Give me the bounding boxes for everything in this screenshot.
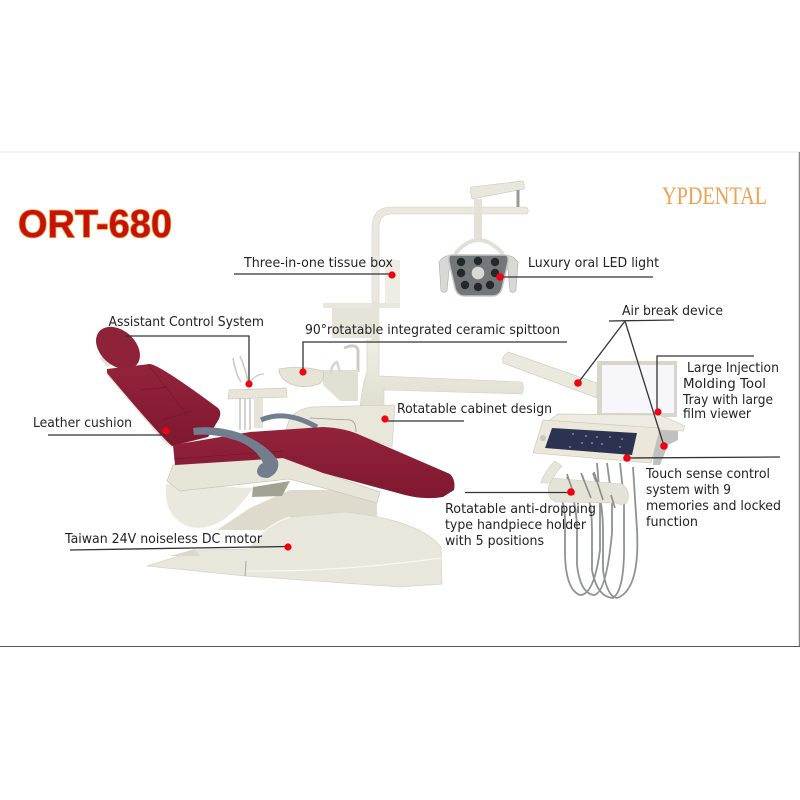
chair pivot disc — [166, 484, 253, 528]
chair base — [147, 490, 442, 587]
handpiece hoses — [555, 463, 637, 598]
light yoke — [455, 240, 503, 254]
light stem — [474, 199, 482, 239]
label: rotatable cabinet design: Rotatable cabinet design — [397, 401, 552, 417]
label: large injection molding tool tray: Molding Tool — [683, 376, 766, 392]
chair back — [106, 364, 220, 447]
label: luxury oral LED light — [496, 255, 659, 281]
label: DC motor: Taiwan 24V noiseless DC motor — [64, 531, 262, 547]
film viewer — [597, 361, 677, 417]
tray side bracket — [653, 428, 678, 465]
upper light arm — [471, 181, 524, 199]
label: large injection molding tool tray: film viewer — [683, 406, 751, 422]
far armrest — [261, 416, 317, 427]
title: ORT-680 — [18, 203, 172, 246]
label: handpiece holder: type handpiece holder — [445, 517, 586, 533]
instrument tray — [543, 414, 685, 431]
label: rotatable ceramic spittoon — [299, 322, 567, 376]
label: touch sense control: memories and locked — [646, 498, 781, 514]
seat support plate — [167, 458, 380, 503]
light handles — [439, 256, 518, 292]
label: handpiece holder: with 5 positions — [445, 533, 544, 549]
lower support column and arm — [360, 340, 524, 408]
label: touch sense control — [623, 454, 781, 530]
label: assistant control system — [108, 314, 264, 388]
label: handpiece holder: Rotatable anti-dropping — [445, 501, 596, 517]
headrest — [88, 318, 148, 378]
label: luxury oral LED light: Luxury oral LED light — [528, 255, 659, 271]
delivery unit arm — [503, 352, 597, 398]
assistant tray — [228, 356, 287, 430]
label: handpiece holder — [445, 488, 596, 549]
light head — [449, 255, 508, 296]
handpiece holder — [541, 461, 628, 508]
label: leather cushion: Leather cushion — [33, 415, 132, 431]
label: three-in-one tissue box — [234, 255, 396, 279]
label: large injection molding tool tray: Large Injection — [687, 360, 779, 376]
label: assistant control system: Assistant Control System — [108, 314, 264, 330]
seat cushion — [173, 427, 454, 498]
cabinet — [286, 405, 395, 447]
tissue box and shelf — [323, 260, 400, 370]
pole and upper arm — [372, 207, 528, 365]
label: air break device — [574, 303, 723, 450]
LED lamps — [457, 257, 499, 291]
label: touch sense control: Touch sense control — [645, 466, 770, 482]
label: rotatable ceramic spittoon: 90°rotatable integrated ceramic spittoon — [305, 322, 560, 338]
near armrest — [193, 427, 278, 478]
label: touch sense control: function — [646, 514, 698, 530]
label: touch sense control: system with 9 — [646, 482, 731, 498]
label: rotatable cabinet design — [381, 401, 552, 423]
label: large injection molding tool tray — [654, 356, 779, 422]
dental light assembly — [372, 181, 528, 365]
label: leather cushion — [33, 415, 170, 435]
label: three-in-one tissue box: Three-in-one tissue box — [243, 255, 393, 271]
ceramic spittoon — [279, 346, 358, 401]
label: air break device: Air break device — [622, 303, 723, 319]
control panel — [533, 420, 660, 463]
label: large injection molding tool tray: Tray with large — [682, 392, 773, 408]
brand name: YPDENTAL — [662, 183, 767, 210]
